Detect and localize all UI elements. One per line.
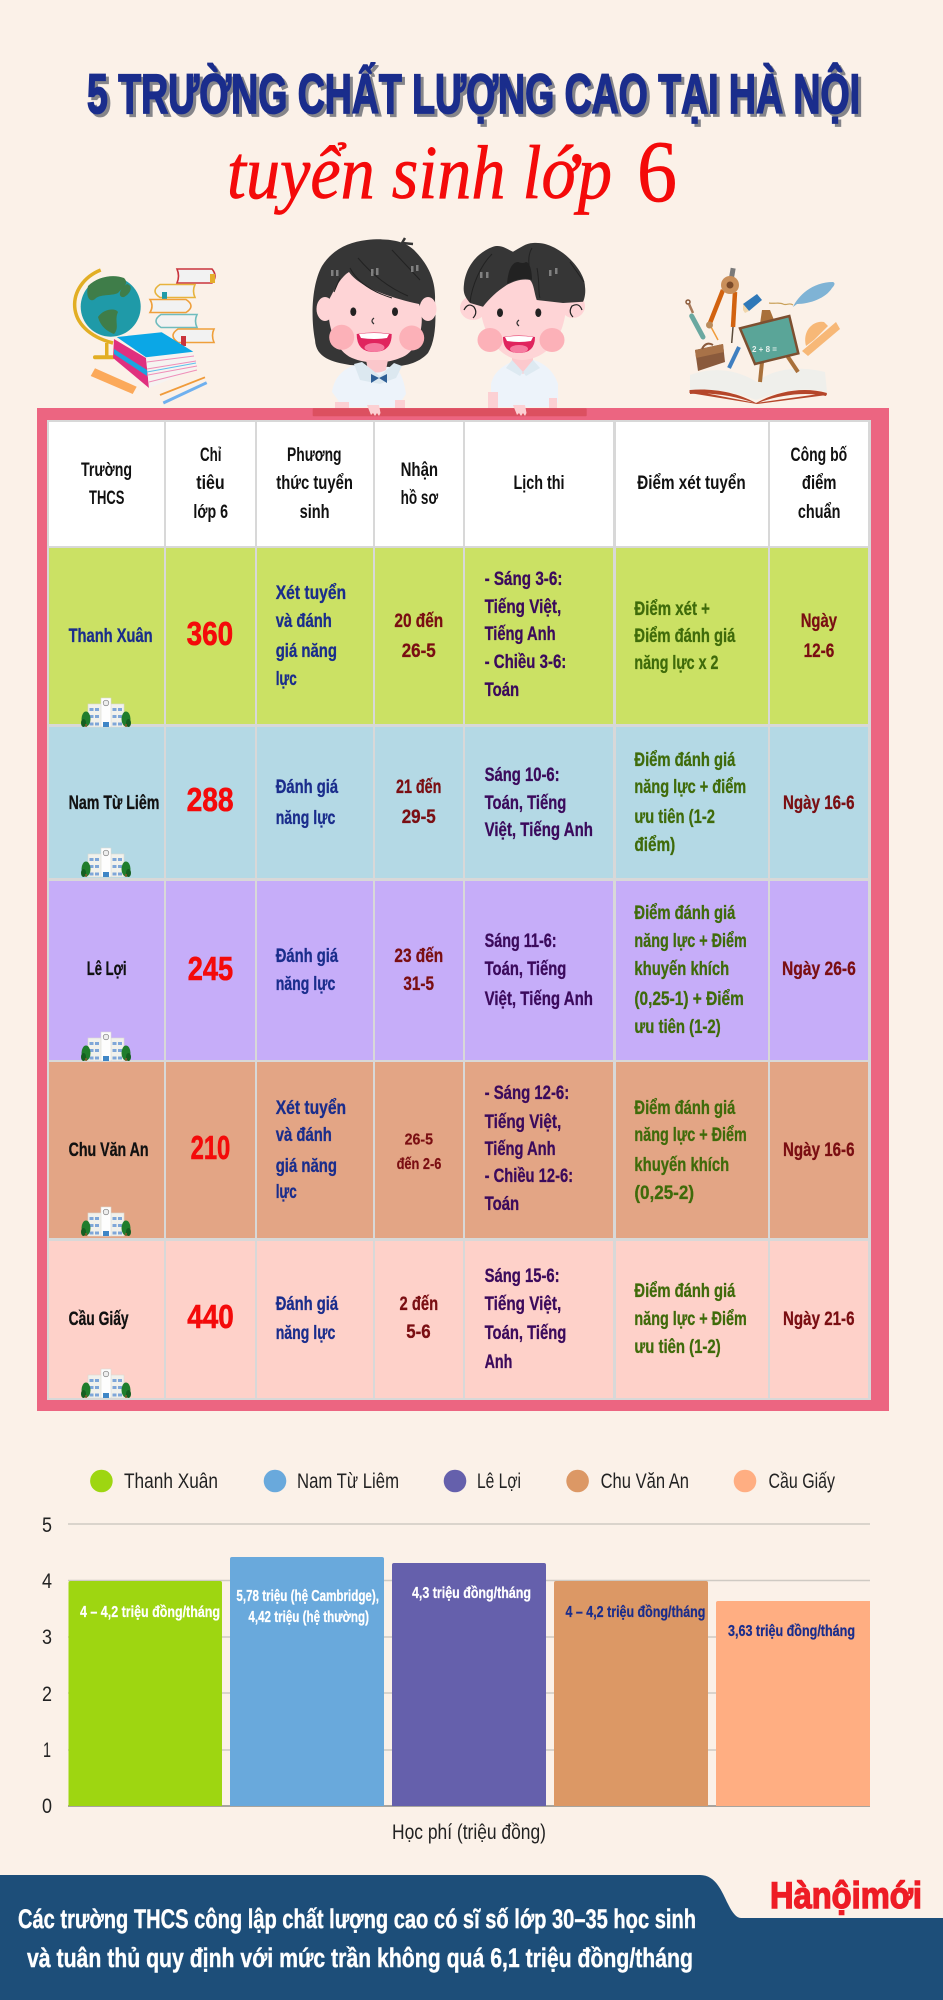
pencil <box>729 347 739 368</box>
table header row: thức tuyển <box>276 472 353 494</box>
table row: Lê Lợi: khuyến khích <box>634 958 729 980</box>
table row: Thanh Xuân: Thanh Xuân <box>69 625 153 647</box>
table row: Thanh Xuân: Ngày <box>801 610 837 632</box>
bar: Chu Văn An <box>554 1581 708 1806</box>
table row: Nam Từ Liêm: năng lực + điểm <box>634 776 746 798</box>
table row: Cầu Giấy: ưu tiên (1-2) <box>634 1336 721 1358</box>
icon: school building, Nam Từ Liêm <box>81 848 131 877</box>
table row: Chu Văn An: Chu Văn An <box>69 1139 149 1161</box>
subtitle: 6 <box>637 124 677 221</box>
table row: Chu Văn An: Toán <box>485 1193 519 1215</box>
table row: Chu Văn An: lực <box>276 1181 297 1203</box>
table row: Lê Lợi: năng lực <box>276 973 335 995</box>
table header row: lớp 6 <box>193 501 228 523</box>
y axis labels: 5 <box>42 1514 52 1537</box>
chart legend: Cầu Giấy <box>768 1470 835 1493</box>
y axis labels <box>42 1514 52 1818</box>
bar: Thanh Xuân: 4 – 4,2 triệu đồng/tháng <box>80 1604 220 1621</box>
protractor <box>802 322 840 356</box>
table row: Chu Văn An <box>49 1062 868 1238</box>
table row: Chu Văn An: giá năng <box>276 1155 337 1177</box>
table row: Chu Văn An: - Chiều 12-6: <box>485 1165 573 1187</box>
table row: Lê Lợi: 245 <box>188 950 233 987</box>
table row: Chu Văn An: Điểm đánh giá <box>634 1097 736 1119</box>
table row: Chu Văn An: năng lực + Điểm <box>634 1124 747 1146</box>
table row: Nam Từ Liêm: Toán, Tiếng <box>485 792 566 814</box>
table row: Nam Từ Liêm: điểm) <box>634 834 675 856</box>
table header row: điểm <box>802 472 836 494</box>
footer banner: Các trường THCS công lập chất lượng cao có sĩ số lớp 30–35 học sinh <box>18 1904 696 1934</box>
table row: Cầu Giấy: Tiếng Việt, <box>485 1293 561 1315</box>
desk ledge with hands <box>313 405 587 416</box>
table row: Lê Lợi: Sáng 11-6: <box>485 930 557 952</box>
table row: Cầu Giấy: năng lực <box>276 1322 335 1344</box>
eraser <box>743 294 762 313</box>
table row: Lê Lợi: (0,25-1) + Điểm <box>634 988 744 1010</box>
logo: Hànộimới: Hànộimới <box>770 1875 922 1916</box>
table row: Cầu Giấy: 440 <box>187 1298 234 1335</box>
table row: Nam Từ Liêm: ưu tiên (1-2 <box>634 806 715 828</box>
table header row: Điểm xét tuyển <box>637 472 746 494</box>
y axis labels: 0 <box>42 1795 52 1818</box>
table row: Cầu Giấy: 2 đến <box>400 1293 438 1315</box>
table row: Nam Từ Liêm: Đánh giá <box>276 776 338 798</box>
briefcase <box>695 344 725 371</box>
x axis title: Học phí (triệu đồng) <box>392 1821 546 1844</box>
table header row: Chỉ <box>200 444 222 466</box>
table row: Thanh Xuân: Toán <box>485 679 519 701</box>
table row: Nam Từ Liêm: 288 <box>187 781 234 818</box>
blackboard <box>740 310 798 382</box>
table row: Cầu Giấy: năng lực + Điểm <box>634 1308 747 1330</box>
subtitle: tuyển sinh lớp <box>227 131 612 215</box>
table row: Chu Văn An: 26-5 <box>405 1132 433 1148</box>
table row: Thanh Xuân: 360 <box>187 615 233 652</box>
table row: Nam Từ Liêm: 29-5 <box>402 806 436 828</box>
illustration: school tools <box>686 268 840 404</box>
table header row: Trường <box>81 459 132 481</box>
table row: Lê Lợi: 31-5 <box>403 973 434 995</box>
table header row: Phương <box>287 444 342 466</box>
pencils <box>160 377 207 403</box>
footer banner: và tuân thủ quy định với mức trần không quá 6,1 triệu đồng/tháng <box>27 1943 693 1973</box>
bar: Cầu Giấy <box>716 1601 870 1806</box>
table header row: Nhận <box>401 459 438 481</box>
icon: school building, Chu Văn An <box>81 1207 131 1236</box>
table header row: chuẩn <box>798 501 840 523</box>
notebooks <box>113 332 197 388</box>
table row: Chu Văn An: Tiếng Anh <box>485 1138 556 1160</box>
bar: Nam Từ Liêm: 5,78 triệu (hệ Cambridge), <box>236 1588 379 1605</box>
table row: Chu Văn An: Xét tuyển <box>276 1097 346 1119</box>
bar: Lê Lợi: 4,3 triệu đồng/tháng <box>412 1585 531 1602</box>
table row: Cầu Giấy: Đánh giá <box>276 1293 338 1315</box>
table row: Lê Lợi: Toán, Tiếng <box>485 958 566 980</box>
table header row: Lịch thi <box>514 472 564 494</box>
table row: Cầu Giấy: Anh <box>485 1351 512 1373</box>
table row: Thanh Xuân: giá năng <box>276 640 337 662</box>
table row: Thanh Xuân: và đánh <box>276 610 332 632</box>
table row: Thanh Xuân: Xét tuyển <box>276 582 346 604</box>
table row: Chu Văn An: - Sáng 12-6: <box>485 1082 569 1104</box>
table row: Nam Từ Liêm: Sáng 10-6: <box>485 764 560 786</box>
chart legend: Nam Từ Liêm <box>297 1470 399 1493</box>
chart legend: Thanh Xuân <box>124 1470 218 1493</box>
open book <box>690 369 827 404</box>
chart legend <box>90 1470 835 1493</box>
table row: Cầu Giấy: Cầu Giấy <box>69 1308 129 1330</box>
y axis labels: 3 <box>42 1626 52 1649</box>
table row: Cầu Giấy <box>49 1241 868 1398</box>
book stack <box>150 269 215 346</box>
chart legend: Chu Văn An <box>601 1470 689 1493</box>
table row: Nam Từ Liêm: năng lực <box>276 807 335 829</box>
table row: Lê Lợi: Đánh giá <box>276 945 338 967</box>
table row: Nam Từ Liêm: Ngày 16-6 <box>783 792 855 814</box>
bar chart: tuition fees <box>42 1470 870 1844</box>
table row: Lê Lợi: 23 đến <box>394 945 443 967</box>
footer banner <box>0 1875 943 2000</box>
table row: Nam Từ Liêm: Việt, Tiếng Anh <box>485 819 593 841</box>
blackboard: 2 + 8 = <box>752 345 777 354</box>
table row: Nam Từ Liêm: Điểm đánh giá <box>634 749 736 771</box>
table header row: tiêu <box>196 472 225 494</box>
ruler <box>91 368 137 394</box>
table header row <box>49 422 868 546</box>
compass <box>706 268 739 343</box>
bar: Nam Từ Liêm <box>230 1557 384 1806</box>
table row: Lê Lợi: Lê Lợi <box>87 958 126 980</box>
y axis labels: 1 <box>43 1739 51 1762</box>
table row: Lê Lợi <box>49 881 868 1060</box>
table row: Thanh Xuân: năng lực x 2 <box>634 652 719 674</box>
icon: school building, Cầu Giấy <box>81 1369 131 1398</box>
icon: school building, Thanh Xuân <box>81 698 131 727</box>
table header row: THCS <box>89 487 124 509</box>
table row: Nam Từ Liêm: 21 đến <box>396 776 441 798</box>
feather <box>793 282 835 307</box>
table row: Cầu Giấy: 5-6 <box>406 1321 431 1343</box>
table row: Thanh Xuân: 20 đến <box>394 610 443 632</box>
table row: Cầu Giấy: Điểm đánh giá <box>634 1280 736 1302</box>
bar: Cầu Giấy: 3,63 triệu đồng/tháng <box>728 1623 855 1640</box>
drawing tool <box>686 300 703 337</box>
table row: Thanh Xuân: Tiếng Anh <box>485 623 556 645</box>
table row: Thanh Xuân: - Sáng 3-6: <box>485 568 562 590</box>
icon: school building, Lê Lợi <box>81 1032 131 1061</box>
table row: Lê Lợi: Việt, Tiếng Anh <box>485 988 593 1010</box>
table row: Cầu Giấy: Ngày 21-6 <box>783 1308 855 1330</box>
illustration: globe and books <box>75 269 215 403</box>
y axis labels: 4 <box>42 1570 52 1593</box>
table row: Chu Văn An: và đánh <box>276 1124 332 1146</box>
table row: Lê Lợi: Ngày 26-6 <box>782 958 856 980</box>
table row: Nam Từ Liêm <box>49 727 868 878</box>
bar: Chu Văn An: 4 – 4,2 triệu đồng/tháng <box>566 1604 705 1621</box>
table row: Thanh Xuân: 12-6 <box>804 640 834 662</box>
chart legend: Lê Lợi <box>477 1470 521 1493</box>
table row: Cầu Giấy: Toán, Tiếng <box>485 1322 566 1344</box>
table row: Chu Văn An: Tiếng Việt, <box>485 1111 561 1133</box>
y axis labels: 2 <box>42 1683 52 1706</box>
table row: Lê Lợi: năng lực + Điểm <box>634 930 747 952</box>
table row: Chu Văn An: 210 <box>191 1129 230 1166</box>
table row: Lê Lợi: ưu tiên (1-2) <box>634 1016 721 1038</box>
table row: Chu Văn An: Ngày 16-6 <box>783 1139 855 1161</box>
table row: Chu Văn An: khuyến khích <box>634 1154 729 1176</box>
table header row: sinh <box>300 501 330 523</box>
illustration: girl student <box>313 238 436 409</box>
table row: Thanh Xuân: - Chiều 3-6: <box>485 651 566 673</box>
panel: admissions table <box>37 408 889 1411</box>
table row: Thanh Xuân <box>49 548 868 724</box>
bar: Nam Từ Liêm: 4,42 triệu (hệ thường) <box>248 1609 369 1626</box>
table row: Thanh Xuân: 26-5 <box>402 640 436 662</box>
table header row: Công bố <box>790 444 847 466</box>
table row: Chu Văn An: đến 2-6 <box>397 1156 442 1173</box>
illustration: boy student <box>460 243 585 409</box>
table row: Thanh Xuân: Điểm đánh giá <box>634 625 736 647</box>
table row: Thanh Xuân: lực <box>276 668 297 690</box>
table header row: hồ sơ <box>401 487 438 509</box>
table row: Nam Từ Liêm: Nam Từ Liêm <box>69 792 159 814</box>
bar: Thanh Xuân <box>68 1581 222 1806</box>
table row: Thanh Xuân: Tiếng Việt, <box>485 596 561 618</box>
table row: Chu Văn An: (0,25-2) <box>634 1182 694 1204</box>
table row: Thanh Xuân: Điểm xét + <box>634 598 710 620</box>
table row: Lê Lợi: Điểm đánh giá <box>634 902 736 924</box>
bar: Lê Lợi <box>392 1563 546 1806</box>
table row: Cầu Giấy: Sáng 15-6: <box>485 1265 560 1287</box>
